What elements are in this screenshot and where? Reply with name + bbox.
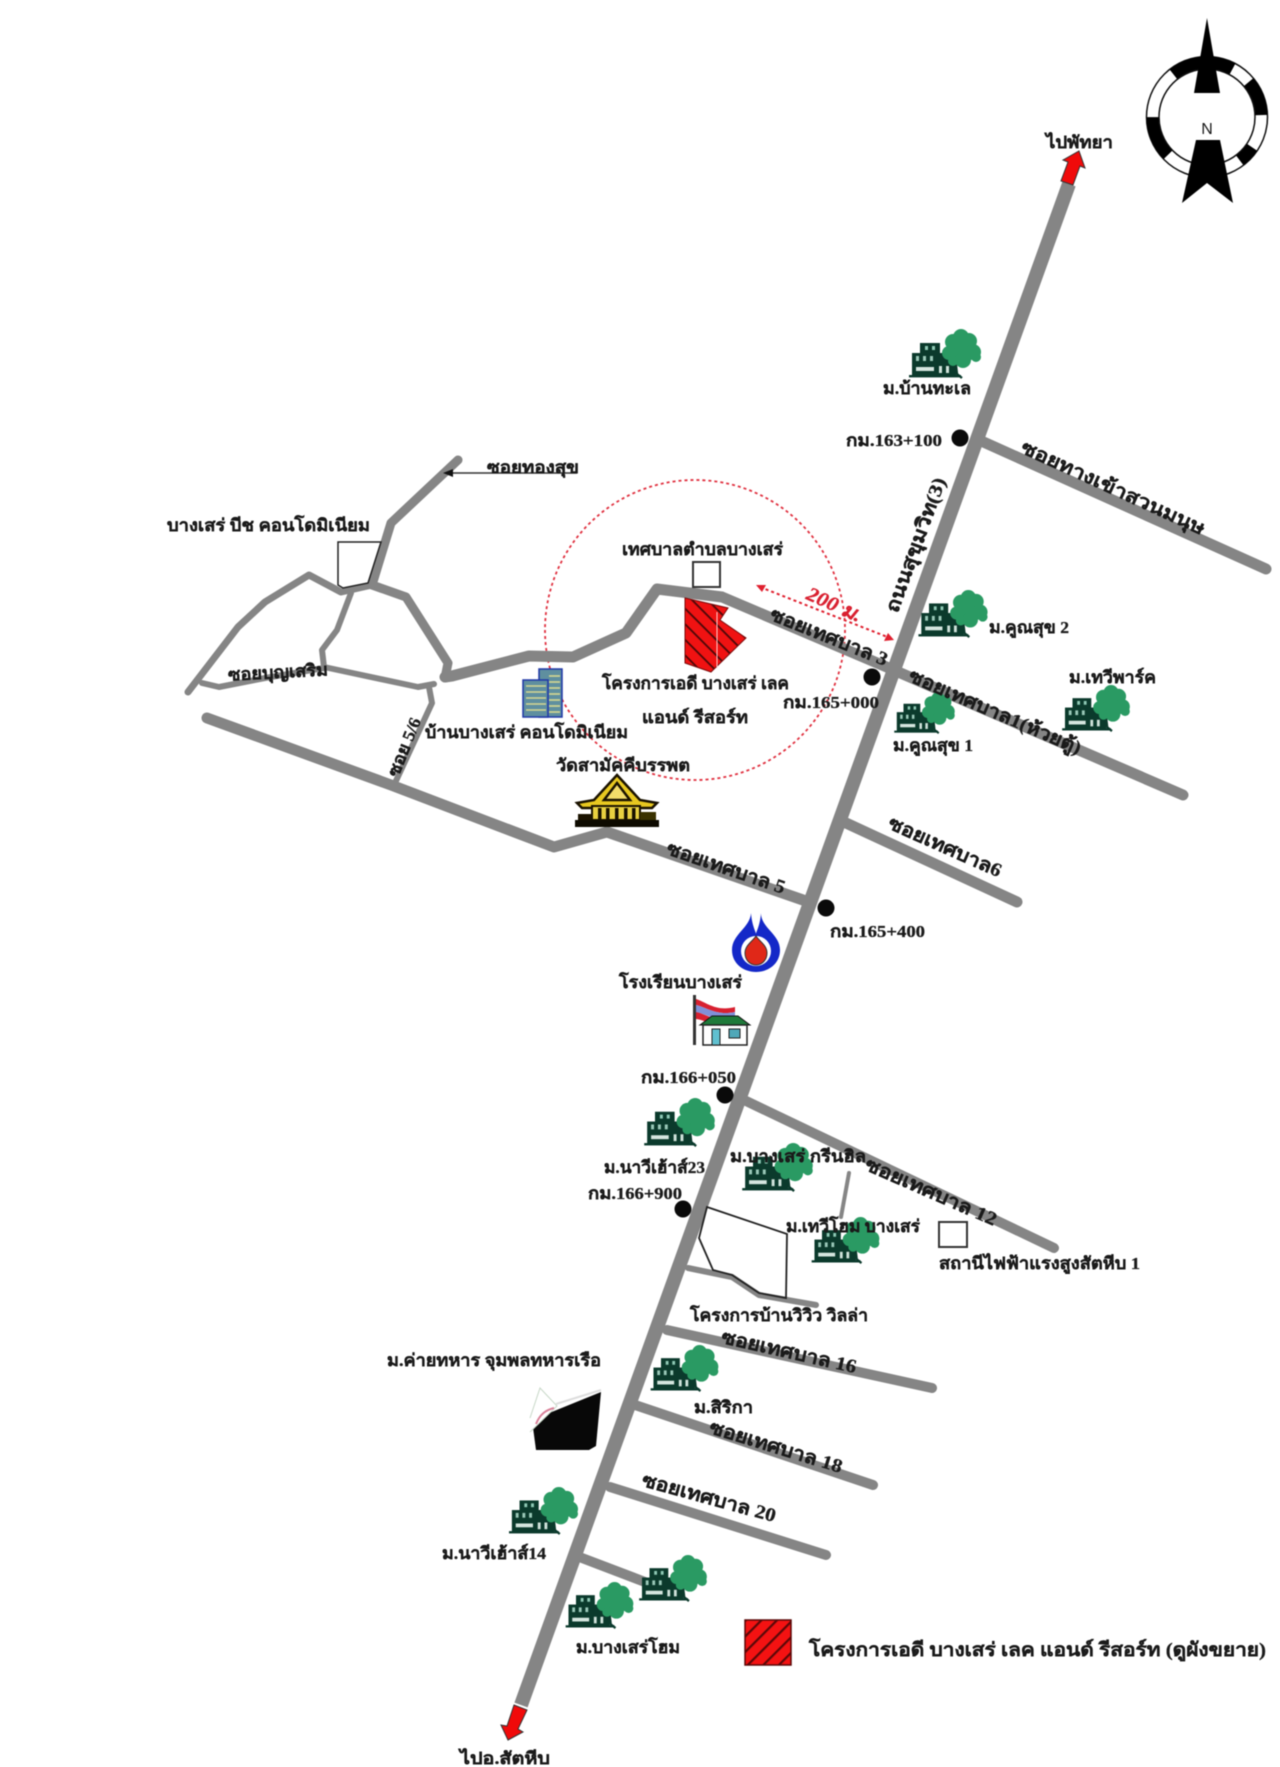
label: 200 m: 200 ม. xyxy=(802,583,865,627)
arrow: to Pattaya xyxy=(1061,151,1085,185)
label: Soi Thetsaban 6: ซอยเทศบาล6 xyxy=(885,813,1005,882)
label: project line 1: โครงการเอดี บางเสร่ เลค xyxy=(601,673,789,693)
label: km 165+400: กม.165+400 xyxy=(830,922,925,941)
label: villa project: โครงการบ้านวิวิว วิลล่า xyxy=(689,1305,868,1325)
label: km 166+050: กม.166+050 xyxy=(641,1068,736,1087)
icon: village Ban Thale xyxy=(909,329,981,378)
arrow: Soi Thongsuk pointer xyxy=(443,469,577,477)
label: km 165+000: กม.165+000 xyxy=(783,693,879,712)
road: Soi Thetsaban 6 xyxy=(846,823,1017,902)
road: Soi Thetsaban 5 xyxy=(207,718,803,900)
icon: navy ship xyxy=(530,1388,601,1450)
label: Soi Thetsaban 5: ซอยเทศบาล 5 xyxy=(664,838,788,899)
label: Soi Thetsaban 12: ซอยเทศบาล 12 xyxy=(862,1154,1000,1231)
road: villa access xyxy=(688,1268,816,1305)
icon: condo building xyxy=(523,669,562,717)
label: Soi Thongsuk: ซอยทองสุข xyxy=(487,458,579,478)
compass: N xyxy=(1201,121,1213,138)
icon: village Thewi Park xyxy=(1062,685,1130,731)
label: temple: วัดสามัคคีบรรพต xyxy=(556,755,690,775)
road: west connector to Soi 3 xyxy=(445,589,1183,795)
200 m radius circle xyxy=(545,480,845,780)
label: Soi Thetsaban 18: ซอยเทศบาล 18 xyxy=(707,1417,845,1478)
legend swatch xyxy=(745,1620,791,1665)
km markers xyxy=(674,430,968,1218)
label: Khunsuk 1: ม.คูณสุข 1 xyxy=(893,736,973,757)
label: Baan Bang Saray condo: บ้านบางเสร่ คอนโดมิเนียม xyxy=(425,722,628,742)
road: entrance soi xyxy=(979,440,1266,569)
main road: Sukhumvit xyxy=(521,184,1069,1705)
label: Soi Thetsaban 16: ซอยเทศบาล 16 xyxy=(719,1327,859,1378)
label: project line 2: แอนด์ รีสอร์ท xyxy=(642,707,748,727)
label: Sirika village: ม.สิริกา xyxy=(694,1398,753,1417)
road: Soi Thetsaban 12 xyxy=(744,1100,1054,1248)
road: west network xyxy=(188,460,458,783)
Bang Saray Beach condo plot xyxy=(338,542,381,588)
icon: school with flag xyxy=(693,995,750,1045)
icon: village Bang Saray Home xyxy=(566,1582,633,1628)
legend xyxy=(745,1620,1266,1665)
compass xyxy=(1146,18,1268,203)
label: Soi Thetsaban 1: ซอยเทศบาล1(ห้วยตู้) xyxy=(905,665,1085,760)
label: Navy House 14: ม.นาวีเฮ้าส์14 xyxy=(442,1543,547,1563)
label: Soi Thetsaban 20: ซอยเทศบาล 20 xyxy=(640,1470,778,1527)
label: Thewi Home: ม.เทวีโฮม บางเสร่ xyxy=(786,1216,921,1236)
label: Soi Boonserm: ซอยบุญเสริม xyxy=(228,660,329,686)
label: Thewi Park: ม.เทวีพาร์ค xyxy=(1069,667,1156,687)
label: to Pattaya: ไปพัทยา xyxy=(1044,132,1113,152)
label: Sukhumvit road: ถนนสุขุมวิท(3) xyxy=(882,475,952,616)
road: Soi Thetsaban 16 xyxy=(667,1330,932,1388)
municipality square xyxy=(693,562,720,587)
label: Ban Thale village: ม.บ้านทะเล xyxy=(883,379,971,398)
label: Bang Saray Home: ม.บางเสร่โฮม xyxy=(576,1637,680,1657)
icon: village Navy House 14 xyxy=(509,1487,578,1534)
label: km 163+100: กม.163+100 xyxy=(846,431,942,450)
label: Soi 5/6: ซอย 5/6 xyxy=(384,715,425,779)
distance arrow 200 m xyxy=(756,585,894,641)
label: substation: สถานีไฟฟ้าแรงสูงสัตหีบ 1 xyxy=(939,1253,1140,1275)
road: Soi 12 branch xyxy=(841,1173,849,1217)
icon: village Bang Saray Green Hill xyxy=(742,1143,813,1191)
icon: gas station flame logo xyxy=(732,913,780,972)
side roads group xyxy=(188,440,1266,1582)
icon: village Khunsuk 1 xyxy=(894,692,955,733)
label: Green Hill village: ม.บางเสร่ กรีนฮิล xyxy=(730,1146,866,1166)
label: Navy House 23: ม.นาวีเฮ้าส์23 xyxy=(604,1157,705,1177)
icon: village Thewi Home xyxy=(812,1217,879,1263)
label: school: โรงเรียนบางเสร่ xyxy=(618,972,743,992)
substation square xyxy=(939,1222,967,1247)
icon: village by short soi xyxy=(639,1555,707,1601)
label: entrance soi: ซอยทางเข้าสวนมนุษ xyxy=(1017,436,1209,541)
road: short soi xyxy=(582,1558,645,1582)
road: Soi Thetsaban 18 xyxy=(635,1405,873,1485)
project site polygon xyxy=(685,598,746,672)
icon: village Khunsuk 2 xyxy=(918,590,988,637)
label: Soi Thetsaban 3: ซอยเทศบาล 3 xyxy=(767,604,891,671)
label: km 166+900: กม.166+900 xyxy=(588,1184,682,1203)
label: Khunsuk 2: ม.คูณสุข 2 xyxy=(989,618,1069,639)
icon: temple xyxy=(575,775,659,827)
arrow: to Sattahip xyxy=(501,1705,527,1740)
icon: village Navy House 23 xyxy=(644,1098,715,1146)
legend text: โครงการเอดี บางเสร่ เลค แอนด์ รีสอร์ท (ดูผังขยาย) xyxy=(808,1638,1266,1662)
icon: village Sirika xyxy=(651,1345,718,1391)
label: municipality: เทศบาลตำบลบางเสร่ xyxy=(622,540,784,559)
road: Soi Thetsaban 20 xyxy=(610,1487,826,1555)
label: Bang Saray Beach condo: บางเสร่ บีช คอนโดมิเนียม xyxy=(167,515,370,535)
label: navy camp: ม.ค่ายทหาร จุมพลทหารเรือ xyxy=(387,1350,601,1371)
villa project plot xyxy=(699,1207,787,1298)
